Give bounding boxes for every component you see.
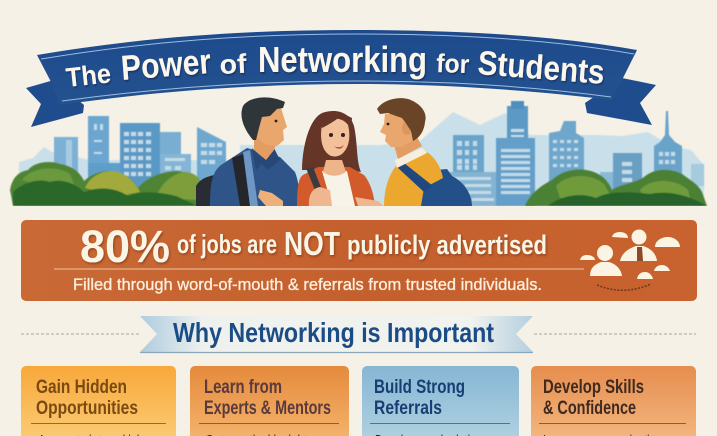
section divider right xyxy=(534,333,696,335)
card: learn from experts and mentors xyxy=(190,366,349,436)
title ribbon xyxy=(26,30,656,127)
student: woman in orange cardigan xyxy=(297,111,384,206)
right trees xyxy=(525,169,707,206)
statistic banner xyxy=(21,220,697,301)
left trees xyxy=(10,162,200,206)
card heading: Build Strong xyxy=(374,377,465,398)
statistic subtext: Filled through word-of-mouth & referrals from trusted individuals. xyxy=(73,275,542,294)
right buildings xyxy=(447,101,704,206)
card heading: & Confidence xyxy=(543,398,636,419)
title text: Networking xyxy=(258,39,427,80)
statistic headline: publicly advertised xyxy=(347,230,547,260)
section divider left xyxy=(21,333,141,335)
card heading: Develop Skills xyxy=(543,377,644,398)
section heading text: Why Networking is Important xyxy=(173,317,494,348)
card heading: Learn from xyxy=(204,377,282,398)
statistic headline: NOT xyxy=(284,225,340,262)
right ribbon tail xyxy=(585,78,656,125)
student: man in yellow shirt with backpack xyxy=(377,98,472,206)
statistic headline xyxy=(80,221,547,272)
title text: Power xyxy=(120,42,213,88)
card heading: Experts & Mentors xyxy=(204,398,331,419)
title text xyxy=(64,39,606,93)
title text: Students xyxy=(476,44,606,92)
title text: of xyxy=(219,49,248,80)
card heading: Gain Hidden xyxy=(36,377,127,398)
title text: for xyxy=(436,48,470,79)
left ribbon tail xyxy=(26,80,84,127)
statistic headline: 80% xyxy=(80,221,170,272)
card: develop skills and confidence xyxy=(531,366,696,436)
section heading ribbon xyxy=(140,316,533,352)
statistic headline: of jobs are xyxy=(177,229,277,259)
title text: The xyxy=(64,58,112,93)
card: build strong referrals xyxy=(362,366,519,436)
left buildings xyxy=(54,116,226,193)
distant hills xyxy=(19,112,704,206)
card heading: Opportunities xyxy=(36,398,138,419)
student: man in navy shirt xyxy=(196,97,301,206)
card: gain hidden opportunities xyxy=(21,366,176,436)
card heading: Referrals xyxy=(374,398,442,419)
main ribbon band xyxy=(37,30,637,105)
illustration: city skyline and students xyxy=(10,97,707,206)
icon: networking people and clouds xyxy=(580,230,680,290)
